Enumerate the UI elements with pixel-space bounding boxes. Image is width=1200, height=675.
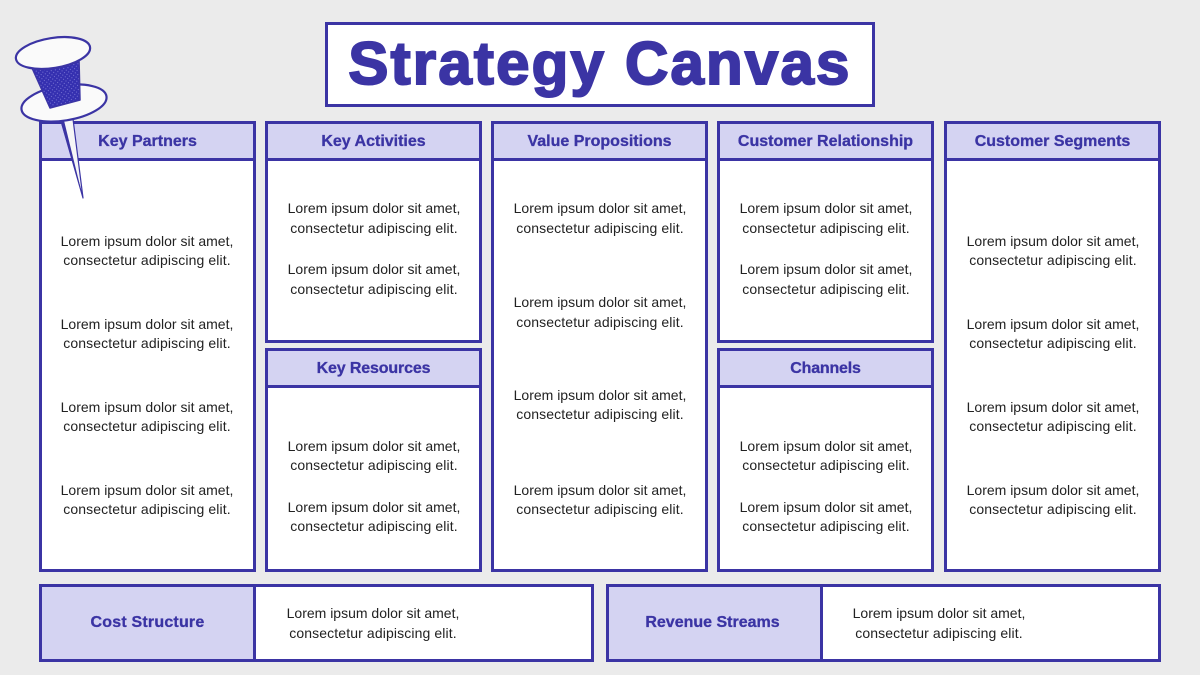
heading: cost structure [39,584,256,662]
text: value propositions 3 [514,387,686,422]
text: key partners 4 [61,482,233,517]
text: cost structure: consectetur adipiscing elit. [289,625,457,641]
panel: key resources [265,348,482,572]
heading: customer segments: Customer Segments [975,133,1130,150]
text: customer relationship 2: Lorem ipsum dolor sit amet, [740,261,912,277]
text: key activities 1: Lorem ipsum dolor sit amet, [288,200,460,216]
text: key activities 2: Lorem ipsum dolor sit amet, [288,261,460,277]
heading: cost structure: Cost Structure [91,614,204,631]
text: value propositions 3: Lorem ipsum dolor sit amet, [514,387,686,403]
text: channels 1 [740,438,912,473]
text: key partners 2: consectetur adipiscing elit. [63,335,231,351]
text: customer segments 2 [967,316,1139,351]
text: value propositions 2: Lorem ipsum dolor sit amet, [514,294,686,310]
heading: revenue streams [606,584,823,662]
heading: channels: Channels [790,360,861,377]
text: customer relationship 1 [740,200,912,236]
text: customer segments 4 [967,482,1139,517]
heading: key partners: Key Partners [98,133,197,150]
text: revenue streams [853,605,1025,641]
text: customer segments 4: consectetur adipiscing elit. [969,501,1137,517]
text: customer segments 3: consectetur adipiscing elit. [969,418,1137,434]
text: customer segments 3: Lorem ipsum dolor sit amet, [967,399,1139,415]
text: customer segments 2: consectetur adipiscing elit. [969,335,1137,351]
text: value propositions 4 [514,482,686,517]
text: channels 2: consectetur adipiscing elit. [742,518,910,534]
text: value propositions 1: consectetur adipiscing elit. [516,220,684,236]
icon: push pin [14,36,108,199]
text: customer segments 2: Lorem ipsum dolor sit amet, [967,316,1139,332]
title: Strategy Canvas [348,30,852,97]
text: customer relationship 2: consectetur adipiscing elit. [742,281,910,297]
text: key resources 1: consectetur adipiscing elit. [290,457,458,473]
heading: value propositions [491,121,708,161]
text: cost structure: Lorem ipsum dolor sit amet, [287,605,459,621]
heading: customer relationship [717,121,934,161]
panel: revenue streams [606,584,1161,662]
text: value propositions 1 [514,200,686,236]
text: channels 2: Lorem ipsum dolor sit amet, [740,499,912,515]
text: cost structure [287,605,459,641]
text: key partners 1: Lorem ipsum dolor sit amet, [61,233,233,249]
heading: key resources [265,348,482,388]
heading: value propositions: Value Propositions [527,133,672,150]
panel: key activities [265,121,482,343]
text: channels 1: Lorem ipsum dolor sit amet, [740,438,912,454]
text: key partners 3: consectetur adipiscing elit. [63,418,231,434]
text: customer segments 4: Lorem ipsum dolor sit amet, [967,482,1139,498]
heading: key resources: Key Resources [317,360,430,377]
panel: customer relationship [717,121,934,343]
text: key resources 1 [288,438,460,473]
text: key activities 1 [288,200,460,236]
heading: customer relationship: Customer Relationship [738,133,913,150]
heading: revenue streams: Revenue Streams [645,614,780,631]
panel: customer segments [944,121,1161,572]
text: key partners 3: Lorem ipsum dolor sit amet, [61,399,233,415]
text: key resources 2 [288,499,460,534]
text: key partners 2 [61,316,233,351]
text: value propositions 2 [514,294,686,330]
heading: key activities [265,121,482,161]
text: revenue streams: consectetur adipiscing elit. [855,625,1023,641]
text: customer segments 1 [967,233,1139,268]
panel: value propositions [491,121,708,572]
text: key activities 1: consectetur adipiscing elit. [290,220,458,236]
text: key resources 2: consectetur adipiscing elit. [290,518,458,534]
heading: customer segments [944,121,1161,161]
panel: cost structure [39,584,594,662]
text: revenue streams: Lorem ipsum dolor sit amet, [853,605,1025,621]
heading: channels [717,348,934,388]
text: customer segments 3 [967,399,1139,434]
panel: channels [717,348,934,572]
text: key activities 2: consectetur adipiscing elit. [290,281,458,297]
text: customer segments 1: consectetur adipiscing elit. [969,252,1137,268]
text: customer relationship 2 [740,261,912,297]
heading: key partners [39,121,256,161]
text: customer segments 1: Lorem ipsum dolor sit amet, [967,233,1139,249]
text: key partners 3 [61,399,233,434]
text: channels 1: consectetur adipiscing elit. [742,457,910,473]
text: key partners 2: Lorem ipsum dolor sit amet, [61,316,233,332]
text: key partners 4: consectetur adipiscing elit. [63,501,231,517]
text: value propositions 4: Lorem ipsum dolor sit amet, [514,482,686,498]
text: customer relationship 1: consectetur adipiscing elit. [742,220,910,236]
text: value propositions 1: Lorem ipsum dolor sit amet, [514,200,686,216]
panel: key partners [39,121,256,572]
text: value propositions 4: consectetur adipiscing elit. [516,501,684,517]
text: key activities 2 [288,261,460,297]
heading: key activities: Key Activities [321,133,426,150]
text: key partners 4: Lorem ipsum dolor sit amet, [61,482,233,498]
text: value propositions 2: consectetur adipiscing elit. [516,314,684,330]
text: key partners 1: consectetur adipiscing elit. [63,252,231,268]
text: value propositions 3: consectetur adipiscing elit. [516,406,684,422]
text: key resources 2: Lorem ipsum dolor sit amet, [288,499,460,515]
text: customer relationship 1: Lorem ipsum dolor sit amet, [740,200,912,216]
text: channels 2 [740,499,912,534]
text: key resources 1: Lorem ipsum dolor sit amet, [288,438,460,454]
text: key partners 1 [61,233,233,268]
